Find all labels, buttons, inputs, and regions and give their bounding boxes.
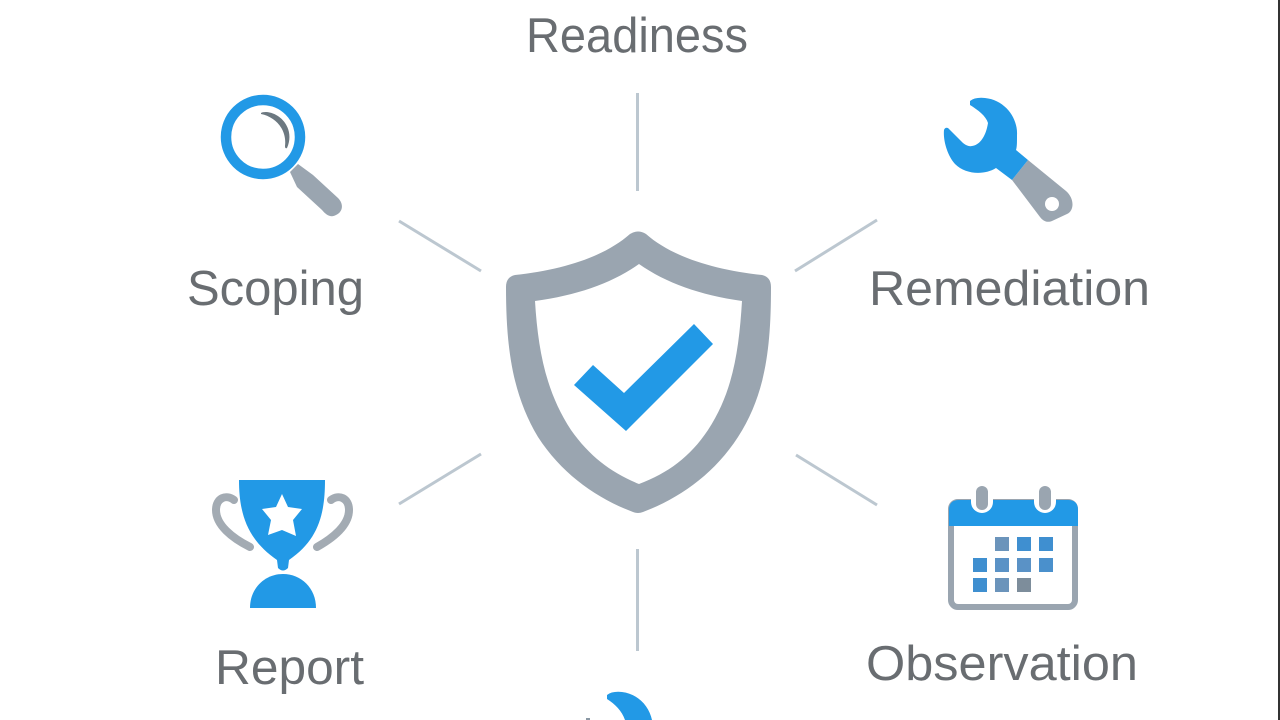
icon: central shield with check <box>506 232 771 513</box>
label: Observation: Observation <box>866 637 1138 691</box>
trophy star <box>262 494 302 536</box>
trophy handles <box>216 497 349 547</box>
label: Remediation: Remediation <box>869 262 1150 316</box>
trophy base <box>250 574 316 608</box>
icon: check mark <box>574 324 713 431</box>
icon: wrench <box>944 98 1072 222</box>
label: Scoping: Scoping <box>187 262 364 316</box>
icon: cropped wrench at bottom edge <box>586 692 652 720</box>
icon: calendar <box>949 483 1078 607</box>
heading: Readiness: Readiness <box>526 9 748 63</box>
icon: trophy <box>216 480 349 608</box>
icon: magnifying glass <box>226 100 342 216</box>
label: Report: Report <box>215 641 364 695</box>
calendar day squares <box>973 537 1053 592</box>
